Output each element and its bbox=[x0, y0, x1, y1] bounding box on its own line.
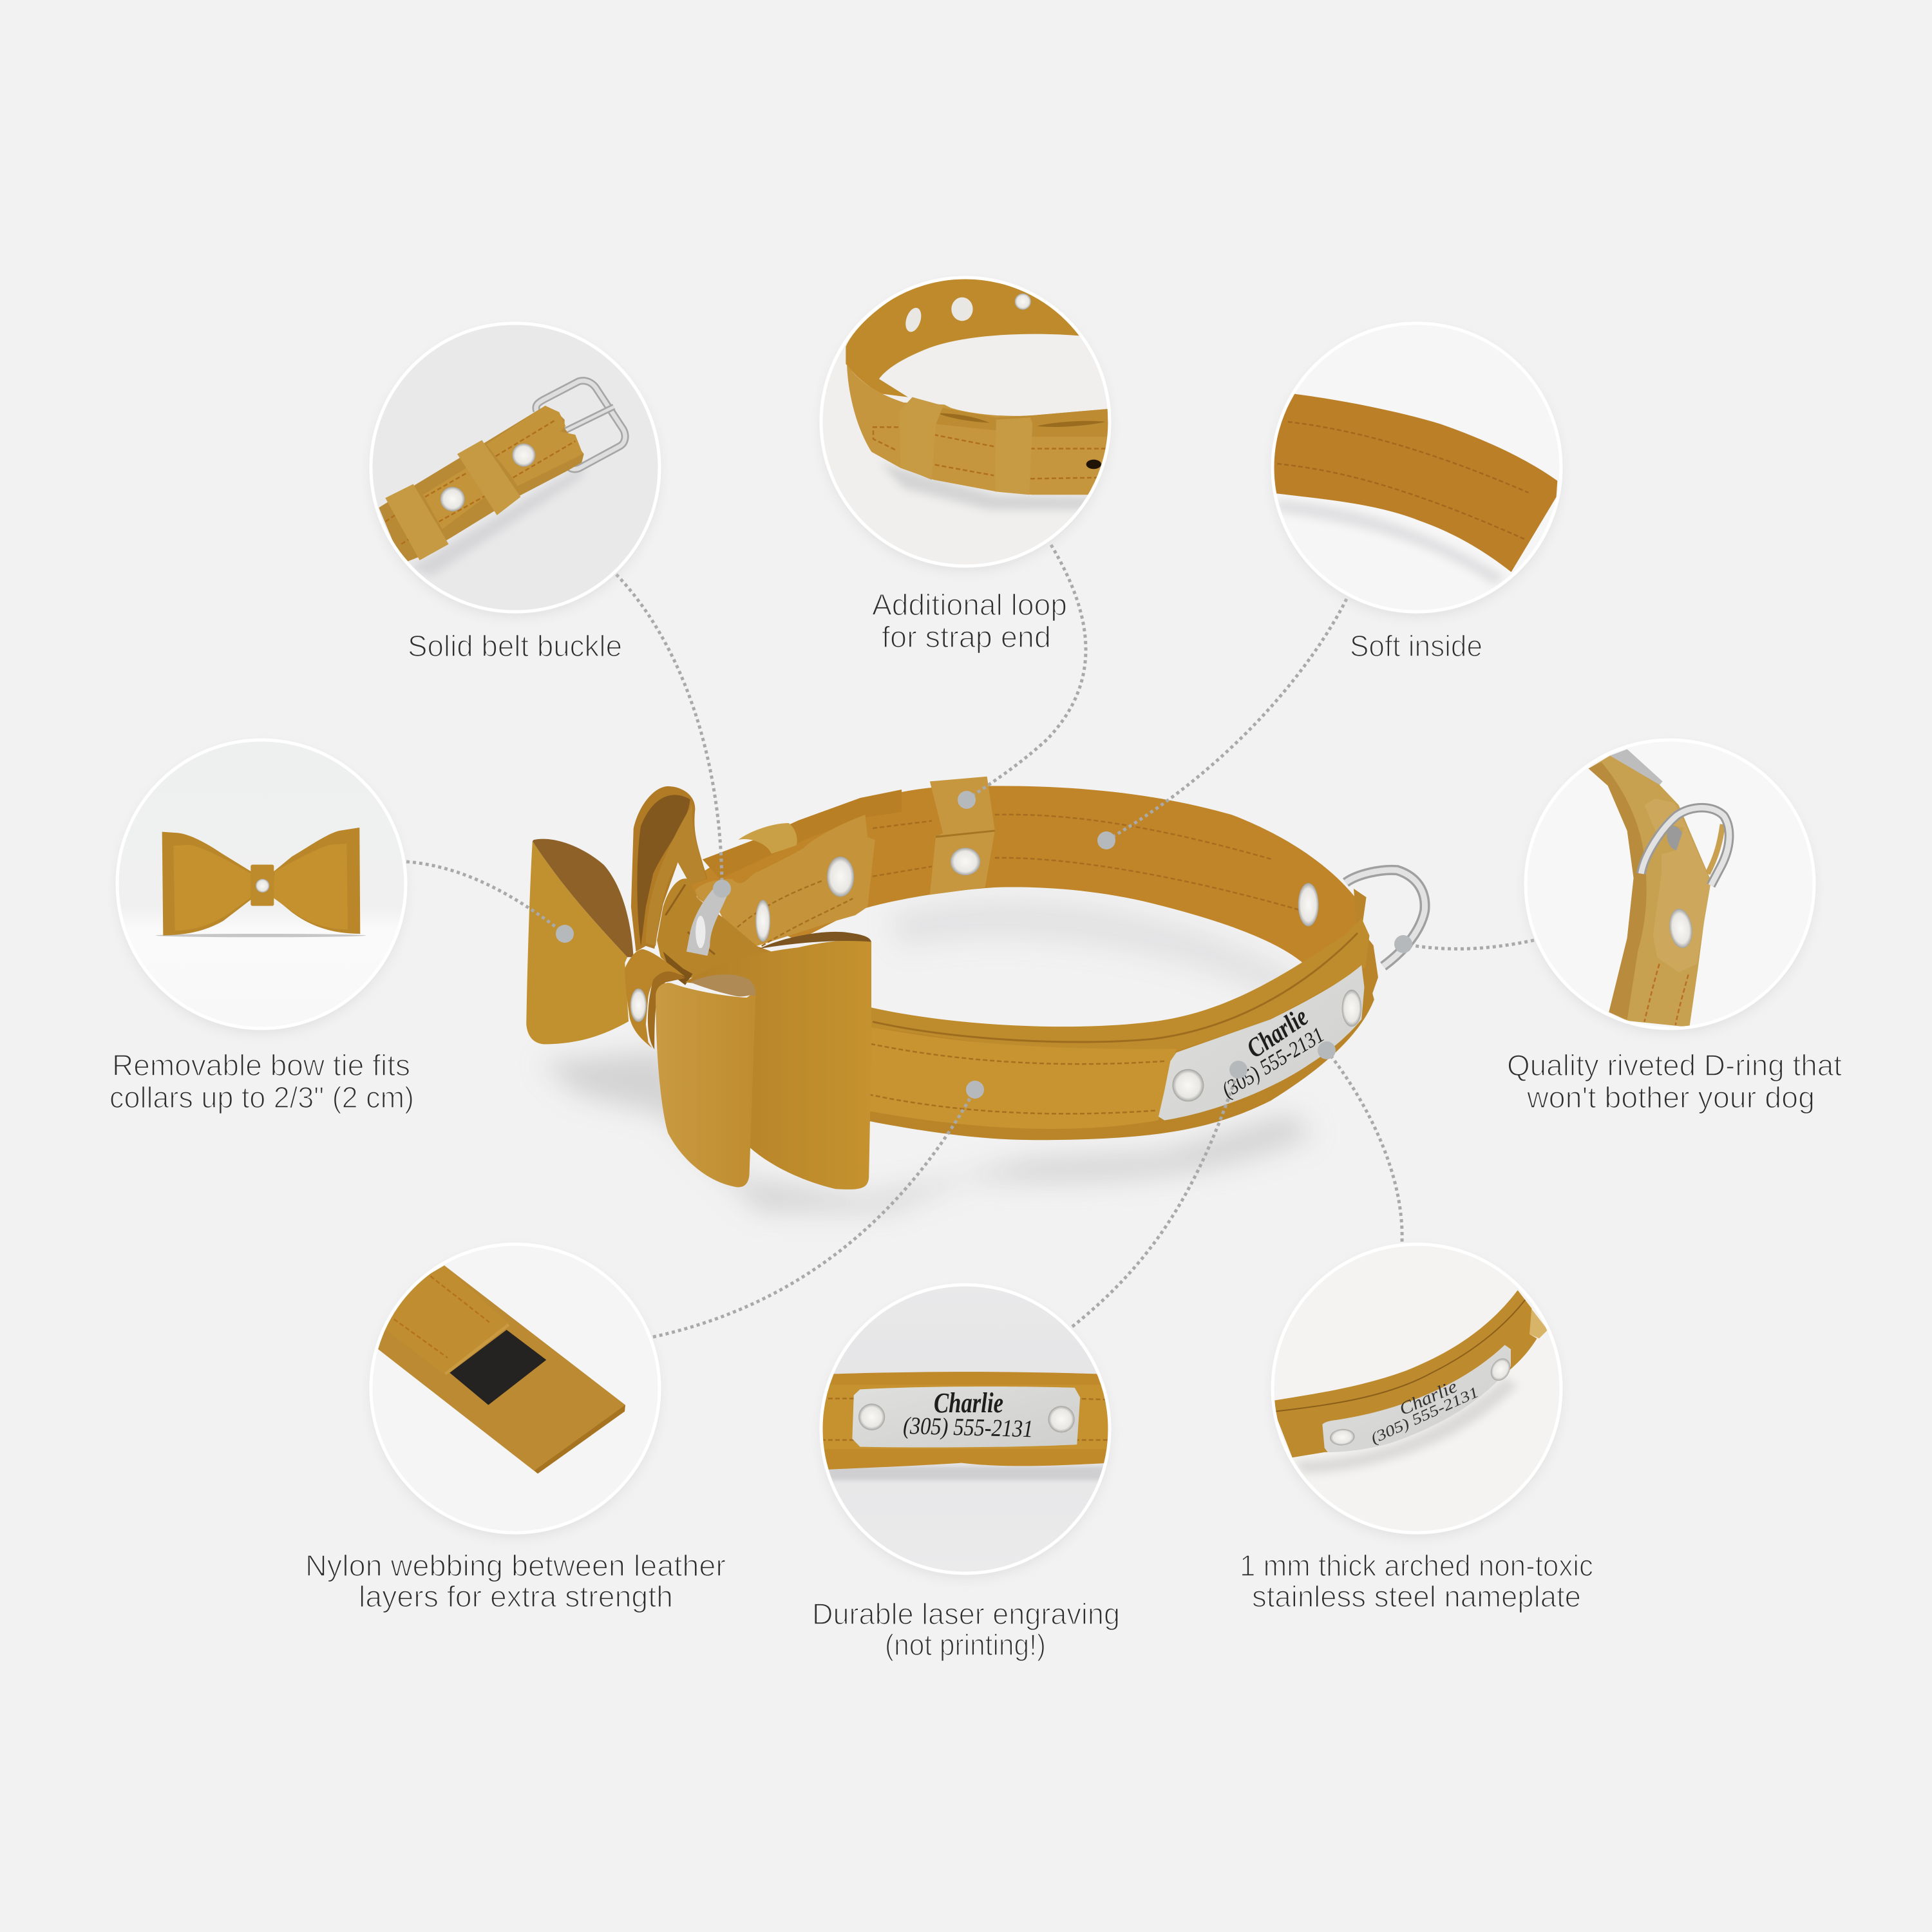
white ring bbox=[821, 278, 1110, 566]
leader line: loop bbox=[967, 545, 1086, 800]
tab upper rivet bbox=[1664, 824, 1687, 853]
collar outer band bbox=[847, 364, 1110, 495]
rivets bbox=[512, 444, 535, 467]
rolled rim bbox=[935, 407, 1108, 437]
metal buckle bbox=[536, 381, 625, 469]
caption: D-ring: won't bother your dog bbox=[1526, 1081, 1815, 1114]
leader line: soft inside bbox=[1106, 599, 1347, 840]
leader line: laser engraving bbox=[1072, 1070, 1238, 1327]
white ring bbox=[371, 323, 659, 612]
caption: nameplate: stainless steel nameplate bbox=[1252, 1580, 1581, 1613]
steel plate bbox=[1610, 749, 1663, 785]
engraved name: Charlie bbox=[1242, 1002, 1314, 1064]
leader line: nameplate bbox=[1327, 1050, 1402, 1242]
caption: additional loop bbox=[872, 588, 1067, 654]
nameplate rivet left bbox=[1172, 1069, 1204, 1102]
band shadow bbox=[1277, 499, 1505, 585]
collar shadow bbox=[541, 900, 1340, 1211]
right D-ring bbox=[1346, 870, 1425, 966]
D-ring tab bbox=[1653, 824, 1711, 972]
right bow front loop bbox=[656, 983, 755, 1187]
strap keepers bbox=[457, 440, 520, 515]
white ring bbox=[1526, 740, 1814, 1028]
D-ring tab bbox=[1530, 1306, 1548, 1338]
caption: additional loop: for strap end bbox=[882, 620, 1051, 654]
rivets bbox=[1329, 1428, 1356, 1446]
lining stitches bbox=[873, 815, 1302, 911]
white ring bbox=[1273, 323, 1561, 612]
panel background bbox=[1527, 741, 1813, 1027]
leather strap bbox=[367, 1265, 625, 1473]
caption: nylon webbing bbox=[305, 1549, 726, 1613]
suede band bbox=[1269, 394, 1557, 572]
panel background bbox=[1274, 1245, 1560, 1531]
centre knot bbox=[251, 865, 274, 906]
band face bbox=[821, 1385, 1110, 1449]
panel: removable bow tie bbox=[117, 740, 406, 1028]
main collar illustration bbox=[526, 777, 1425, 1211]
collar band bbox=[1273, 1290, 1537, 1457]
front wings bbox=[173, 845, 251, 931]
front band stitches bbox=[869, 1044, 1164, 1113]
leader line: nylon webbing bbox=[653, 1090, 975, 1337]
strap end bbox=[695, 815, 875, 946]
rim gaps bbox=[937, 413, 990, 423]
small keeper bbox=[738, 823, 797, 854]
engraved name: Charlie bbox=[1396, 1376, 1461, 1419]
white ring bbox=[371, 1244, 659, 1533]
front band raised rim bbox=[869, 918, 1369, 1052]
front band base bbox=[865, 967, 1374, 1140]
panel: soft inside bbox=[1269, 323, 1561, 612]
left half of collar with bow bbox=[526, 786, 902, 1189]
panel background bbox=[822, 1286, 1108, 1572]
strap inner edge bbox=[1589, 762, 1647, 1019]
top loop keeper bbox=[930, 777, 995, 895]
caption: soft inside: Soft inside bbox=[1350, 629, 1482, 663]
rivet: keeper bbox=[951, 848, 980, 875]
stitches bbox=[873, 427, 1106, 478]
strap stitches bbox=[1644, 964, 1689, 1025]
circle shadows bbox=[117, 283, 1814, 1578]
buckle strap back layer bbox=[379, 406, 584, 562]
caption: buckle: Solid belt buckle bbox=[408, 629, 622, 663]
engraved phone number: (305) 555-2131 bbox=[1368, 1384, 1481, 1447]
panel background bbox=[383, 340, 648, 605]
back wings bbox=[162, 832, 251, 936]
tab rivet bbox=[1667, 907, 1694, 949]
engraved phone number: (305) 555-2131 bbox=[1218, 1023, 1329, 1103]
front band main face bbox=[865, 1027, 1176, 1129]
nameplate bbox=[1159, 965, 1365, 1121]
layered leather under bow bbox=[657, 878, 772, 980]
D-ring bbox=[1641, 808, 1729, 886]
panel background bbox=[1274, 325, 1560, 611]
collar shadow bbox=[880, 462, 1097, 510]
engraved name: Charlie bbox=[934, 1387, 1003, 1419]
caption: additional loop: Additional loop bbox=[872, 588, 1067, 621]
keepers bbox=[900, 397, 943, 480]
rim lines bbox=[1275, 1300, 1525, 1412]
panel background bbox=[823, 334, 1107, 564]
white ring bbox=[117, 740, 406, 1028]
leader line: D-ring bbox=[1403, 940, 1534, 949]
collar band bbox=[821, 1372, 1110, 1470]
caption: bow tie: collars up to 2/3" (2 cm) bbox=[109, 1081, 414, 1114]
caption: laser engraving: (not printing!) bbox=[885, 1628, 1046, 1662]
panel: laser engraving bbox=[821, 1285, 1110, 1573]
shadow under band bbox=[821, 1466, 1110, 1480]
flap stitches bbox=[394, 1276, 489, 1358]
caption: laser engraving bbox=[812, 1597, 1120, 1662]
back of D-ring bbox=[1708, 824, 1723, 874]
band stitches bbox=[821, 1399, 1110, 1440]
strap shadow bbox=[415, 471, 583, 576]
rivet bbox=[256, 879, 269, 893]
panel: solid belt buckle bbox=[371, 323, 659, 612]
right keeper tab bbox=[1354, 889, 1378, 1002]
inner suede lining bbox=[679, 786, 1361, 963]
strap end stitch bbox=[732, 880, 853, 946]
caption: nameplate bbox=[1240, 1549, 1593, 1613]
white ring bbox=[821, 1285, 1110, 1573]
nameplate bbox=[852, 1387, 1080, 1448]
bow rivet bbox=[630, 989, 647, 1022]
panel: nylon webbing bbox=[367, 1244, 659, 1533]
right half of collar bbox=[679, 777, 1425, 1140]
holes and rivets in lining bbox=[905, 308, 921, 332]
top back bow loop bbox=[631, 786, 708, 952]
caption: laser engraving: Durable laser engraving bbox=[812, 1597, 1120, 1631]
leader line: belt buckle bbox=[616, 574, 722, 889]
strap end edge bbox=[535, 1405, 625, 1473]
plate rivets bbox=[858, 1404, 885, 1430]
right bow back loop bbox=[685, 940, 871, 1189]
panel: arched nameplate bbox=[1273, 1244, 1561, 1533]
panel background bbox=[118, 741, 404, 1027]
caption: bow tie: Removable bow tie fits bbox=[112, 1048, 410, 1082]
left bow loop bbox=[526, 841, 629, 1045]
rivet: strap end left bbox=[755, 900, 770, 942]
caption: nameplate: 1 mm thick arched non-toxic bbox=[1240, 1549, 1593, 1582]
nylon webbing bbox=[450, 1330, 546, 1405]
collar lining bbox=[846, 274, 1082, 397]
panel: additional loop bbox=[821, 274, 1110, 566]
caption: D-ring: Quality riveted D-ring that bbox=[1507, 1048, 1842, 1082]
nameplate bbox=[1322, 1345, 1511, 1452]
caption: bow tie bbox=[109, 1048, 414, 1114]
nameplate rivet right bbox=[1342, 990, 1361, 1027]
leader line: bow tie bbox=[406, 862, 565, 934]
bow centre knot bbox=[625, 949, 685, 1048]
marker dots bbox=[556, 791, 1412, 1099]
riveted strap face bbox=[486, 406, 583, 486]
rivet: inner right bbox=[1298, 883, 1318, 926]
ground shadow bbox=[156, 934, 366, 937]
buckle ring bbox=[687, 880, 727, 956]
rivet: strap end bbox=[827, 857, 854, 897]
collar strap bbox=[1589, 755, 1710, 1027]
caption: nylon webbing: layers for extra strength bbox=[359, 1580, 673, 1613]
dark gap under strap bbox=[663, 952, 693, 985]
suede stitches bbox=[1277, 422, 1528, 540]
caption: nylon webbing: Nylon webbing between leather bbox=[305, 1549, 726, 1582]
caption: D-ring bbox=[1507, 1048, 1842, 1114]
strap stitches bbox=[385, 420, 575, 544]
band shadow bbox=[1294, 1377, 1518, 1473]
upper flap bbox=[380, 1265, 509, 1375]
strap hole bbox=[1086, 460, 1101, 469]
panel background bbox=[372, 1245, 658, 1531]
panel: riveted D-ring bbox=[1526, 740, 1814, 1028]
white ring bbox=[1273, 1244, 1561, 1533]
engraved phone number: (305) 555-2131 bbox=[903, 1412, 1034, 1443]
upper suede strip bbox=[703, 790, 902, 879]
